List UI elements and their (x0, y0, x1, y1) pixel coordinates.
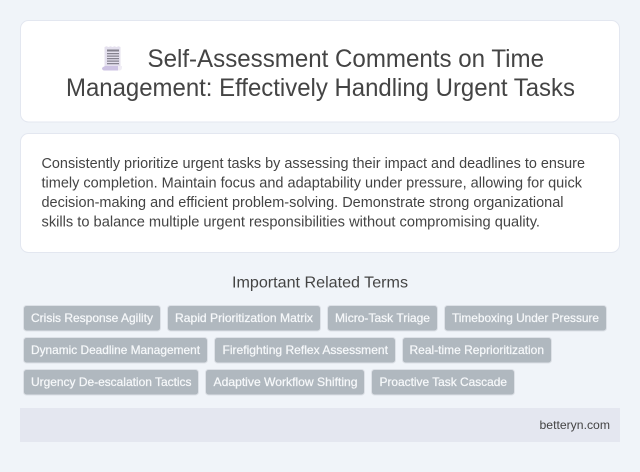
footer source text: betteryn.com (540, 418, 610, 432)
tag: adaptive workflow shifting: Adaptive Workflow Shifting (214, 375, 358, 389)
title (66, 45, 575, 102)
footer bar (20, 408, 620, 442)
tag: dynamic deadline management (24, 338, 208, 363)
tag: firefighting reflex assessment: Firefighting Reflex Assessment (222, 343, 389, 357)
tag: firefighting reflex assessment (214, 338, 396, 363)
text block: self-assessment summary: skills to balance multiple urgent responsibilities without compromising quality. (42, 214, 540, 230)
tag: micro-task triage: Micro-Task Triage (335, 311, 430, 325)
tag: rapid prioritization matrix (168, 306, 320, 331)
tag: crisis response agility (24, 306, 160, 331)
heading: important related terms: Important Related Terms (232, 274, 408, 292)
tag list: related terms (24, 306, 606, 395)
tag: crisis response agility: Crisis Response Agility (31, 311, 153, 325)
tag: real-time reprioritization (402, 338, 552, 363)
title: Management: Effectively Handling Urgent Tasks (66, 74, 575, 102)
tag: urgency de-escalation tactics (24, 370, 198, 395)
text block: self-assessment summary (42, 156, 585, 230)
tag: micro-task triage (328, 306, 438, 331)
tag: proactive task cascade: Proactive Task Cascade (380, 375, 507, 389)
text block: self-assessment summary: decision-making and efficient problem-solving. Demonstrate strong organizational (42, 195, 564, 211)
tag: urgency de-escalation tactics: Urgency De-escalation Tactics (31, 375, 192, 389)
text block: self-assessment summary: timely completion. Maintain focus and adaptability under pressure, allowing for quick (42, 176, 583, 192)
tag: proactive task cascade (372, 370, 514, 395)
tag: adaptive workflow shifting (206, 370, 364, 395)
tag: rapid prioritization matrix: Rapid Prioritization Matrix (175, 311, 313, 325)
text block: self-assessment summary: Consistently prioritize urgent tasks by assessing their impact and deadlines to ensure (42, 156, 585, 172)
tag: timeboxing under pressure: Timeboxing Under Pressure (452, 311, 599, 325)
tag: dynamic deadline management: Dynamic Deadline Management (31, 343, 201, 357)
title: Self-Assessment Comments on Time (148, 45, 544, 73)
panel: title card (20, 20, 620, 122)
tag: timeboxing under pressure (444, 306, 606, 331)
icon: receipt document (102, 46, 122, 70)
tag: real-time reprioritization: Real-time Reprioritization (410, 343, 544, 357)
panel: summary paragraph (20, 134, 620, 252)
